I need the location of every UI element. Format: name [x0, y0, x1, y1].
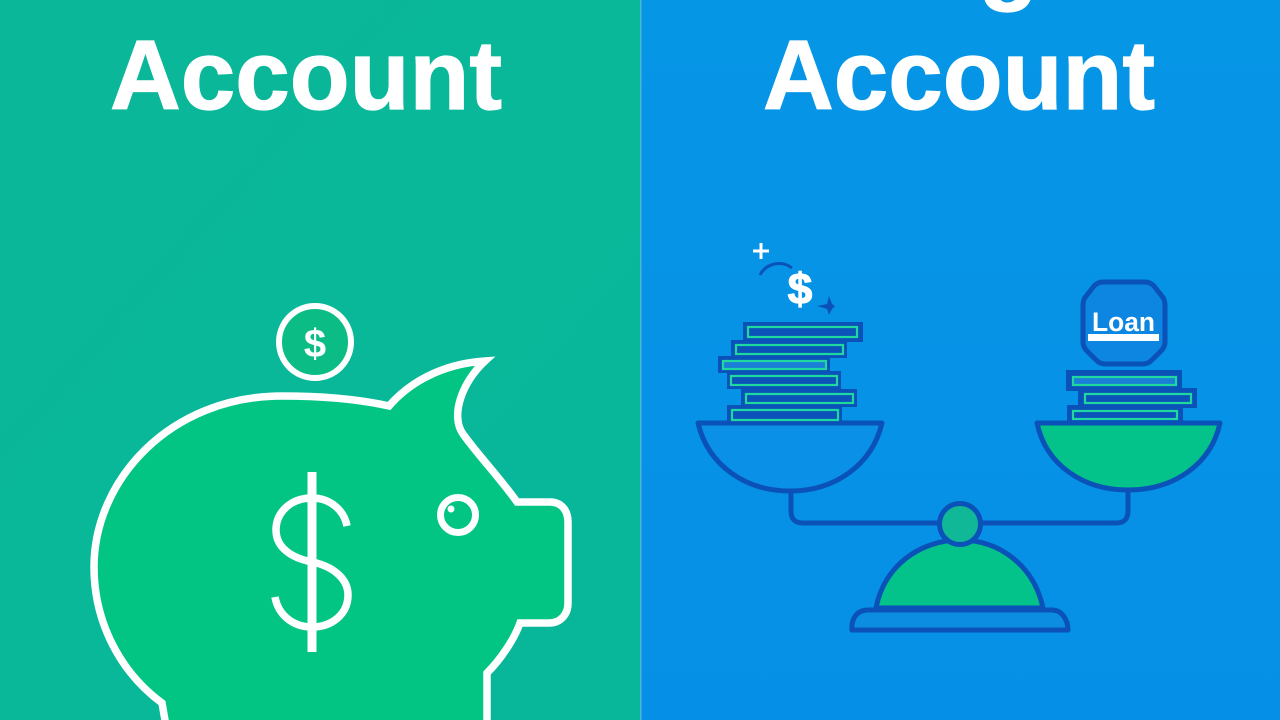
icon: loan weight: Loan: [1092, 307, 1155, 337]
icon: piggy bank: [94, 361, 568, 720]
icon: dollar with sparkles: [753, 243, 835, 315]
icon: loan weight: [1083, 282, 1165, 364]
right stack of loan notes: [1068, 372, 1195, 422]
heading: cash account: Account: [110, 20, 502, 130]
right bowl: [1037, 423, 1220, 490]
left bowl: [698, 423, 882, 491]
icon: dollar sign on pig: [275, 472, 348, 652]
icon: coin dropping into piggy bank: $: [304, 322, 326, 366]
icon: pig eye: [440, 498, 476, 532]
icon: balance scale: [698, 243, 1220, 630]
heading: margin account: Account: [763, 20, 1155, 130]
scale pivot: [940, 504, 980, 544]
icon: coin dropping into piggy bank: [279, 306, 351, 378]
panel: cash account: [0, 0, 640, 720]
icon: dollar with sparkles: $: [788, 265, 812, 314]
scale base: [852, 610, 1068, 630]
scale beam: [791, 490, 1128, 523]
scale dome stand: [876, 540, 1043, 608]
left stack of cash: [720, 324, 861, 422]
panel: margin account: [640, 0, 1280, 720]
